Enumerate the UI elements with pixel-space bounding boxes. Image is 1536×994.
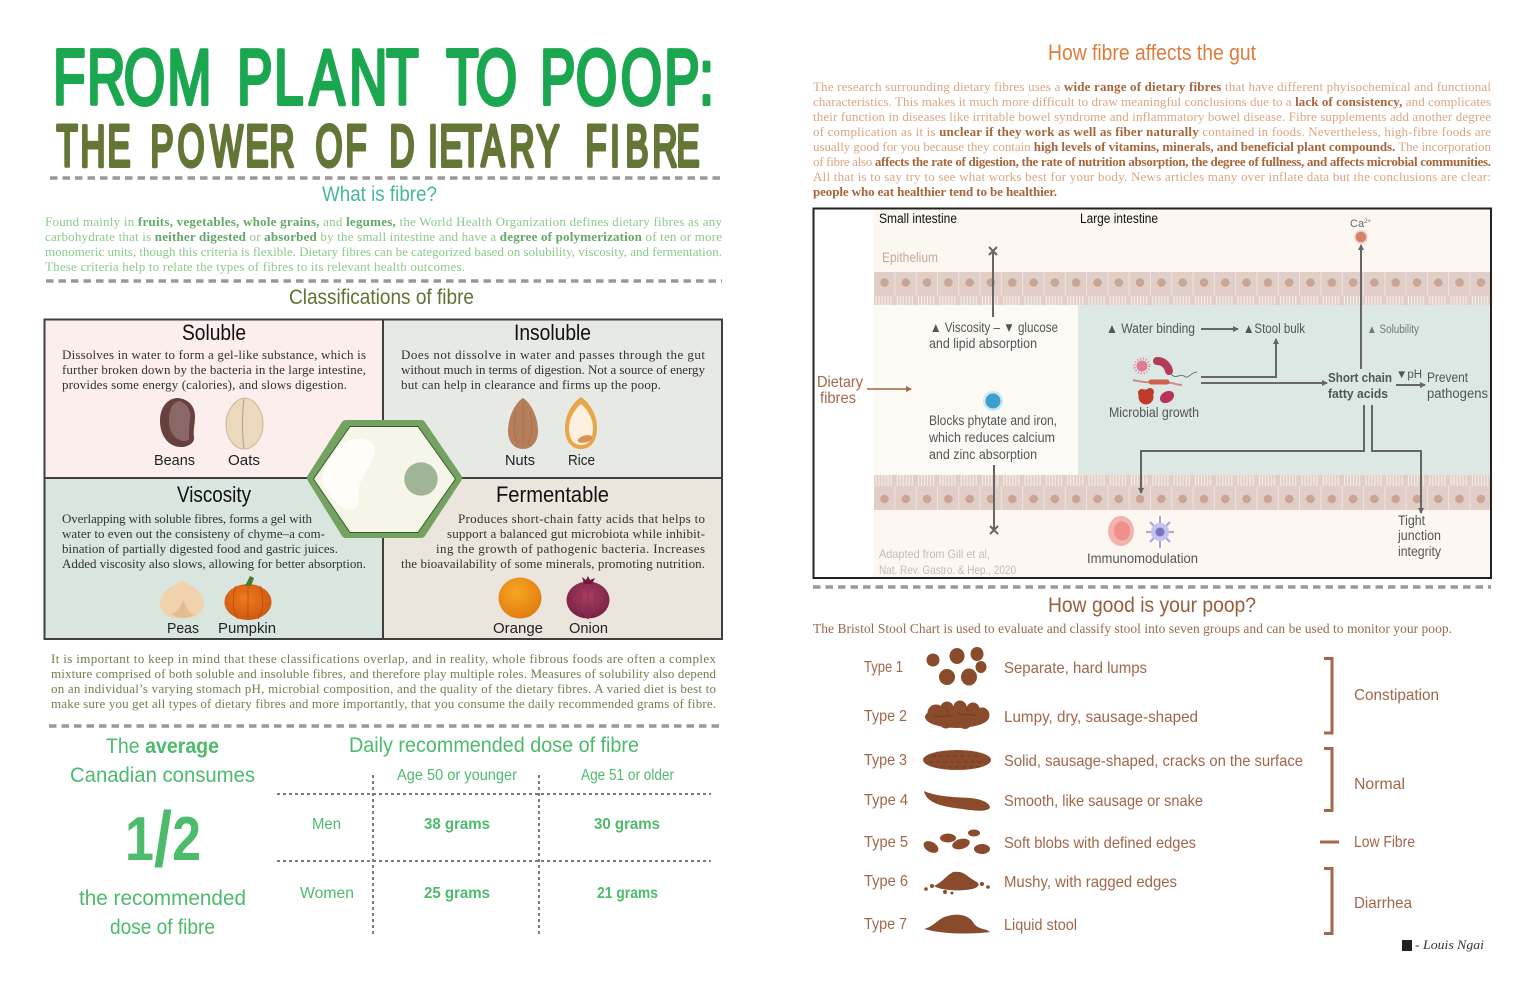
panel: fermentable: the bioavailability of some minerals, promoting nutrition. [401,556,705,571]
type 6 [864,872,1177,894]
text block: overlap note: on an individual’s varying stomach pH, microbial composition, and the quality of the dietary fibres. A varied diet is best to [51,681,716,696]
text block: gut research: The research surrounding dietary fibres uses a wide range of dietary fibres that have different phyisochemical and functional [813,79,1491,94]
text block: overlap note [51,651,716,711]
panel: viscosity: Added viscosity also slows, allowing for better absorption. [62,556,366,571]
text block: gut research: usually good for you because they contain high levels of vitamins, minerals, and beneficial plant compounds. The incorporation [813,139,1492,154]
label: dietary fibres: Dietary [817,374,863,391]
type 5: Type 5 [864,834,908,851]
type 2: Lumpy, dry, sausage-shaped [1004,709,1198,726]
panel: soluble: Dissolves in water to form a gel-like substance, which is [62,347,366,362]
type 4 [864,791,1203,811]
table: daily recommended dose of fibre: 21 grams [597,885,658,902]
type 5: Soft blobs with defined edges [1004,835,1196,852]
callout: average canadian consumes half: The average [106,735,219,758]
type 4: Type 4 [864,792,908,809]
arrow: water binding to stool bulk [1201,328,1238,330]
arrow: fatty acids to calcium [1360,245,1362,369]
citation [879,547,1016,577]
labels: stool categories: Low Fibre [1354,834,1415,851]
panel: soluble: Beans [154,452,195,469]
arrow: microbes to stool bulk [1201,339,1276,377]
callout: average canadian consumes half: the recommended [79,887,246,910]
arrow: fatty acids to tight junction [1372,405,1421,513]
labels: small intestine effects [928,320,1058,462]
callout: average canadian consumes half: Canadian consumes [70,764,255,787]
type 3: Type 3 [864,752,907,769]
panel: fermentable: Produces short-chain fatty acids that helps to [458,511,705,526]
type 6: Type 6 [864,873,908,890]
icon: beans [160,398,195,447]
text block: gut research: people who eat healthier tend to be healthier. [813,184,1057,199]
icon: onion [566,576,610,619]
heading: how fibre affects the gut: How fibre affects the gut [1048,40,1256,65]
icon: peas [160,580,204,618]
text block: gut research: of complication as it is unclear if they work as well as fiber naturally contained in foods. Nevertheless, high-fibre foods are [813,124,1491,139]
labels: large intestine effects: ▲Stool bulk [1243,321,1305,336]
text block: gut research [813,79,1492,199]
panel: gut diagram: Epithelium [882,250,938,265]
text block: what is fibre: carbohydrate that is neither digested or absorbed by the small intestine and have a degree of polymerization of ten or more [45,229,722,244]
title: from plant to poop [53,35,714,179]
panel: gut diagram: Small intestine [879,211,957,226]
panel: fermentable: Onion [569,620,608,637]
labels: stool categories: Constipation [1354,687,1439,704]
citation: Adapted from Gill et al, [879,547,990,561]
panel: insoluble [383,319,722,478]
heading: what is fibre: What is fibre? [322,183,437,206]
icon: nuts [508,398,538,449]
text block: what is fibre: Found mainly in fruits, vegetables, whole grains, and legumes, the World Health Organization defines dietary fibres as any [45,214,722,229]
text block: gut research: characteristics. This makes it much more difficult to draw meaningful conclusions due to a lack of consistency, and complicates [813,94,1491,109]
labels: large intestine effects: Short chain [1328,370,1392,385]
panel: viscosity: Viscosity [177,482,251,507]
labels: large intestine effects: ▼pH [1396,369,1422,381]
type 5 [864,830,1196,855]
text block: gut research: All that is to say try to see what works best for your body. News articles many over inflate data but the conclusions are clear: [813,169,1491,184]
panel: soluble [44,319,383,478]
table: daily recommended dose of fibre: Men [312,816,341,833]
panel: fermentable: support a balanced gut microbiota while inhibit- [447,526,705,541]
panel: fermentable: ing the growth of pathogenic bacteria. Increases [436,541,705,556]
labels: stool categories [1354,687,1439,912]
labels: large intestine effects: fatty acids [1328,386,1388,401]
panel: insoluble: Does not dissolve in water and passes through the gut [401,347,705,362]
text block: what is fibre [45,214,722,274]
panel: fermentable: Fermentable [496,482,609,507]
panel: gut diagram [814,208,1491,578]
type 7: Liquid stool [1004,917,1077,934]
panel: insoluble: but can help in clearance and firms up the poop. [401,377,661,392]
table: daily recommended dose of fibre: Daily recommended dose of fibre [349,734,639,757]
brackets: stool categories [1320,658,1339,934]
arrow: fatty acids to pathogens [1396,384,1425,386]
labels: small intestine effects: and lipid absorption [929,336,1037,351]
arrow: microbes to short chain fatty acids [1201,382,1327,384]
text block: overlap note: make sure you get all types of dietary fibres and more importantly, that you consume the daily recommended grams of fibre. [51,696,716,711]
panel: fermentable: Orange [493,620,543,637]
panel: viscosity: Peas [167,620,199,637]
arrow: absorption blocked downward [990,465,998,534]
calcium ion [1350,218,1371,243]
callout: average canadian consumes half: dose of fibre [110,916,215,939]
label: dietary fibres [817,374,863,407]
icon: blue mineral bead [983,391,1003,411]
callout: average canadian consumes half: 2 [172,805,201,874]
table: daily recommended dose of fibre: 30 grams [594,816,660,833]
icon: oats [226,398,263,449]
panel: insoluble: without much in terms of digestion. Not a source of energy [401,362,706,377]
labels: large intestine effects [1087,321,1488,566]
type 1 [864,647,1147,686]
text block: gut research: of fibre also affects the rate of digestion, the rate of nutrition absorption, the degree of fullness, and affects microbial communities. [813,154,1491,169]
text block: gut research: their function in diseases like irritable bowel syndrome and inflammatory bowel disease. Fibre supplements add another degree [813,109,1491,124]
labels: large intestine effects: Prevent [1427,370,1468,385]
title: from plant to poop: THE POWER OF DIETARY FIBRE [57,115,700,179]
panel: viscosity: bination of partially digested food and gastric juices. [62,541,338,556]
text block: bristol intro: The Bristol Stool Chart is used to evaluate and classify stool into seven groups and can be used to monitor your poop. [813,621,1452,636]
labels: stool categories: Normal [1354,776,1405,793]
table: daily recommended dose of fibre: Age 50 or younger [397,767,518,784]
panel: viscosity [44,478,383,639]
text block: what is fibre: These criteria help to relate the types of fibres to its relevant health outcomes. [45,259,465,274]
table: daily recommended dose of fibre: Age 51 or older [581,767,675,784]
labels: large intestine effects: integrity [1398,544,1441,559]
panel: soluble: provides some energy (calories), and slows digestion. [62,377,347,392]
type 6: Mushy, with ragged edges [1004,874,1177,891]
panel: soluble: further broken down by the bacteria in the large intestine, [62,362,366,377]
labels: small intestine effects: ▲ Viscosity – ▼ glucose [930,320,1058,335]
panel: insoluble: Rice [568,452,595,469]
text block: overlap note: mixture comprised of both soluble and insoluble fibres, and therefore play multiple roles. Measures of solubility also depend [51,666,716,681]
panel: viscosity: Pumpkin [218,620,276,637]
table: daily recommended dose of fibre: 38 grams [424,816,490,833]
panel: classification grid [44,319,722,639]
type 3: Solid, sausage-shaped, cracks on the surface [1004,753,1303,770]
heading: how good is your poop: How good is your poop? [1048,594,1256,617]
labels: small intestine effects: Blocks phytate and iron, [929,413,1057,428]
labels: large intestine effects: pathogens [1427,386,1488,401]
labels: small intestine effects: and zinc absorption [929,447,1037,462]
labels: large intestine effects: Microbial growth [1109,405,1199,420]
type 7: Type 7 [864,916,907,933]
type 2: Type 2 [864,708,907,725]
arrow: dietary fibres in [867,388,911,390]
calcium ion: Ca [1350,218,1364,230]
panel: soluble: Oats [228,452,260,469]
panel: insoluble: Insoluble [514,320,591,345]
type 1: Type 1 [864,659,903,676]
labels: large intestine effects: ▲ Water binding [1106,321,1195,336]
arrow: viscosity blocked upward [989,247,997,317]
labels: large intestine effects: ▲ Solubility [1367,324,1419,336]
panel: gut diagram: Large intestine [1080,211,1158,226]
labels: stool categories: Diarrhea [1354,895,1412,912]
labels: small intestine effects: which reduces calcium [928,430,1055,445]
labels: large intestine effects: Immunomodulation [1087,551,1198,566]
icon: rice [565,397,597,449]
type 7 [864,915,1077,934]
label: dietary fibres: fibres [820,390,856,407]
table: daily recommended dose of fibre: 25 grams [424,885,490,902]
text block: what is fibre: monomeric units, though this criteria is flexible. Dietary fibres can be categorized based on solubility, viscosity, and fermentation. [45,244,722,259]
panel: viscosity: water to even out the consisteny of chyme–a com- [62,526,325,541]
panel: viscosity: Overlapping with soluble fibres, forms a gel with [62,511,312,526]
text block: overlap note: It is important to keep in mind that these classifications overlap, and in reality, whole fibrous foods are often a complex [51,651,716,666]
icon: microbes [1133,358,1197,406]
heading: classifications of fibre: Classifications of fibre [289,286,474,309]
table: daily recommended dose of fibre [277,734,711,936]
type 4: Smooth, like sausage or snake [1004,793,1203,810]
callout: average canadian consumes half: / [154,795,172,883]
table: daily recommended dose of fibre: Women [300,885,354,902]
calcium ion: 2+ [1364,219,1371,225]
citation: Nat. Rev. Gastro. & Hep., 2020 [879,563,1016,577]
panel: insoluble: Nuts [505,452,535,469]
icon: orange [498,578,542,618]
icon: pumpkin [224,576,272,620]
icon: plant cell hexagon [312,425,457,533]
author credit: - Louis Ngai [1415,938,1485,952]
title: from plant to poop: FROM PLANT TO POOP: [53,35,714,122]
chart: bristol stool types [864,647,1303,934]
epithelium band: bottom [874,475,1491,510]
callout: average canadian consumes half [70,735,255,939]
labels: large intestine effects: junction [1397,528,1441,543]
labels: large intestine effects: Tight [1398,513,1425,528]
type 3 [864,750,1303,770]
arrow: fatty acids to immunomodulation [1141,405,1364,493]
type 2 [864,700,1198,729]
callout: average canadian consumes half: 1 [125,805,159,874]
panel: soluble: Soluble [182,320,246,345]
icon: immune cells [1108,516,1174,548]
panel: fermentable [383,478,722,639]
type 1: Separate, hard lumps [1004,660,1147,677]
epithelium band: top [874,272,1491,305]
